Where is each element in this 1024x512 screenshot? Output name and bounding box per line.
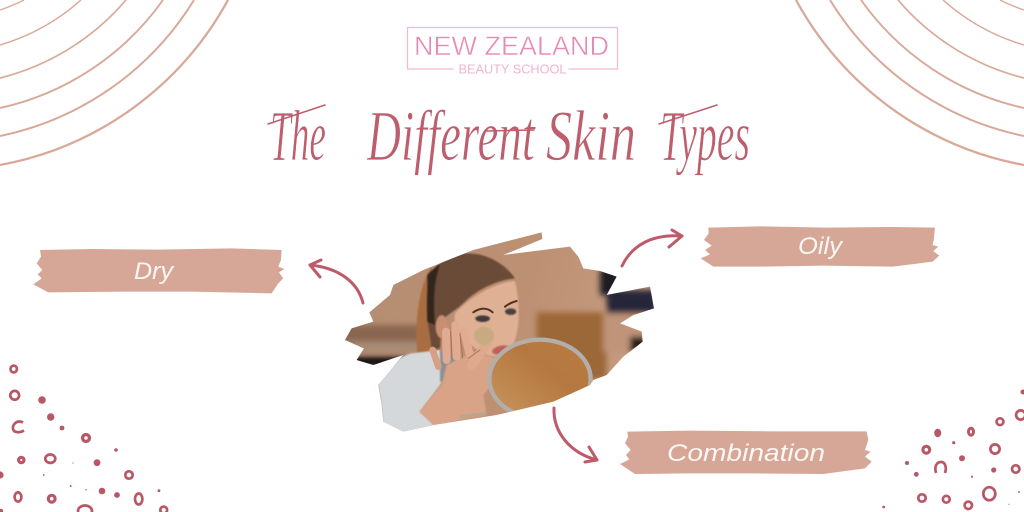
title: The Different Skin Types: Types: [660, 97, 750, 176]
ear: [436, 315, 448, 338]
decoration: concentric arcs top right: [796, 0, 1024, 165]
fingers: [433, 325, 488, 367]
photo: woman applying make-up with a mirror, in a brush-stroke mask: [345, 232, 654, 432]
panel: Dry label: [33, 248, 284, 293]
arrow: to Combination: [554, 408, 597, 462]
bracelet: [460, 413, 487, 417]
title: The Different Skin Types: Skin: [546, 97, 636, 176]
panel: Oily label: [701, 226, 939, 267]
panel: Dry label: Dry: [134, 258, 175, 285]
face: [455, 281, 519, 357]
mirror: [489, 340, 591, 418]
hair: [427, 253, 515, 348]
arrow: to Oily: [622, 230, 682, 266]
ponytail: [416, 267, 443, 353]
title: The Different Skin Types: Different: [366, 97, 536, 176]
logo: New Zealand Beauty School: BEAUTY SCHOOL: [458, 62, 567, 76]
title: The Different Skin Types: The: [270, 97, 326, 176]
eyebrows and eyes: [473, 301, 517, 312]
sponge: [474, 327, 494, 345]
lips: [492, 344, 508, 356]
decoration: dots bottom left: [0, 366, 167, 512]
decoration: concentric arcs top left: [0, 0, 228, 165]
panel: Combination label: [620, 431, 872, 474]
panel: Oily label: Oily: [798, 233, 844, 260]
forearm and palm: [419, 352, 496, 427]
logo: New Zealand Beauty School: NEW ZEALAND: [414, 31, 609, 61]
photo background: [345, 232, 654, 432]
panel: Combination label: Combination: [667, 440, 825, 467]
title: The Different Skin Types: [268, 97, 750, 176]
logo: New Zealand Beauty School: [408, 28, 618, 76]
arrow: to Dry: [310, 260, 363, 303]
decoration: dots bottom right: [882, 390, 1024, 509]
shirt: [378, 350, 445, 433]
